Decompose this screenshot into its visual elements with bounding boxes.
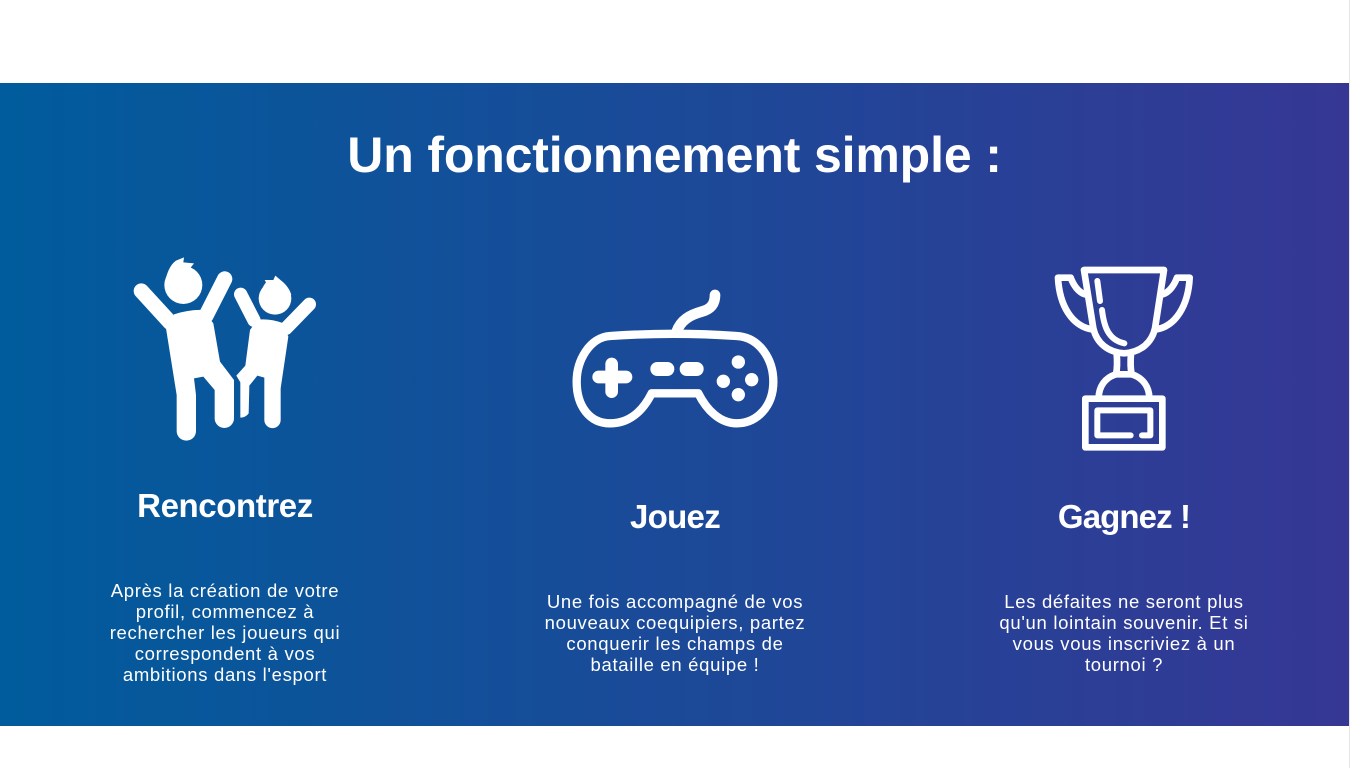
text: Rencontrez description: profil, commencez à [136, 601, 314, 622]
text: Rencontrez description: ambitions dans l'esport [123, 664, 327, 685]
text: Gagnez description: tournoi ? [1085, 654, 1163, 675]
text: Gagnez description: qu'un lointain souvenir. Et si [999, 612, 1249, 633]
icon: two jumping friends [141, 257, 309, 441]
text: Jouez description: bataille en équipe ! [591, 654, 759, 675]
text: Rencontrez description: correspondent à vos [135, 643, 315, 664]
text: Jouez description [545, 591, 805, 675]
text: Jouez description: nouveaux coequipiers, partez [545, 612, 805, 633]
icon: trophy [1058, 270, 1190, 447]
text: Gagnez description: vous vous inscriviez à un [1013, 633, 1235, 654]
icon: game controller [577, 295, 773, 423]
text: Jouez description: conquerir les champs de [566, 633, 784, 654]
heading: Jouez: Jouez [630, 498, 720, 535]
title: Un fonctionnement simple : [347, 127, 1002, 183]
heading: Rencontrez: Rencontrez [137, 487, 313, 524]
text: Rencontrez description: rechercher les joueurs qui [110, 622, 340, 643]
text: Rencontrez description: Après la création de votre [111, 580, 339, 601]
heading: Gagnez: Gagnez ! [1058, 498, 1190, 535]
text: Rencontrez description [110, 580, 340, 685]
text: Jouez description: Une fois accompagné de vos [547, 591, 803, 612]
text: Gagnez description [999, 591, 1249, 675]
text: Gagnez description: Les défaites ne seront plus [1004, 591, 1244, 612]
